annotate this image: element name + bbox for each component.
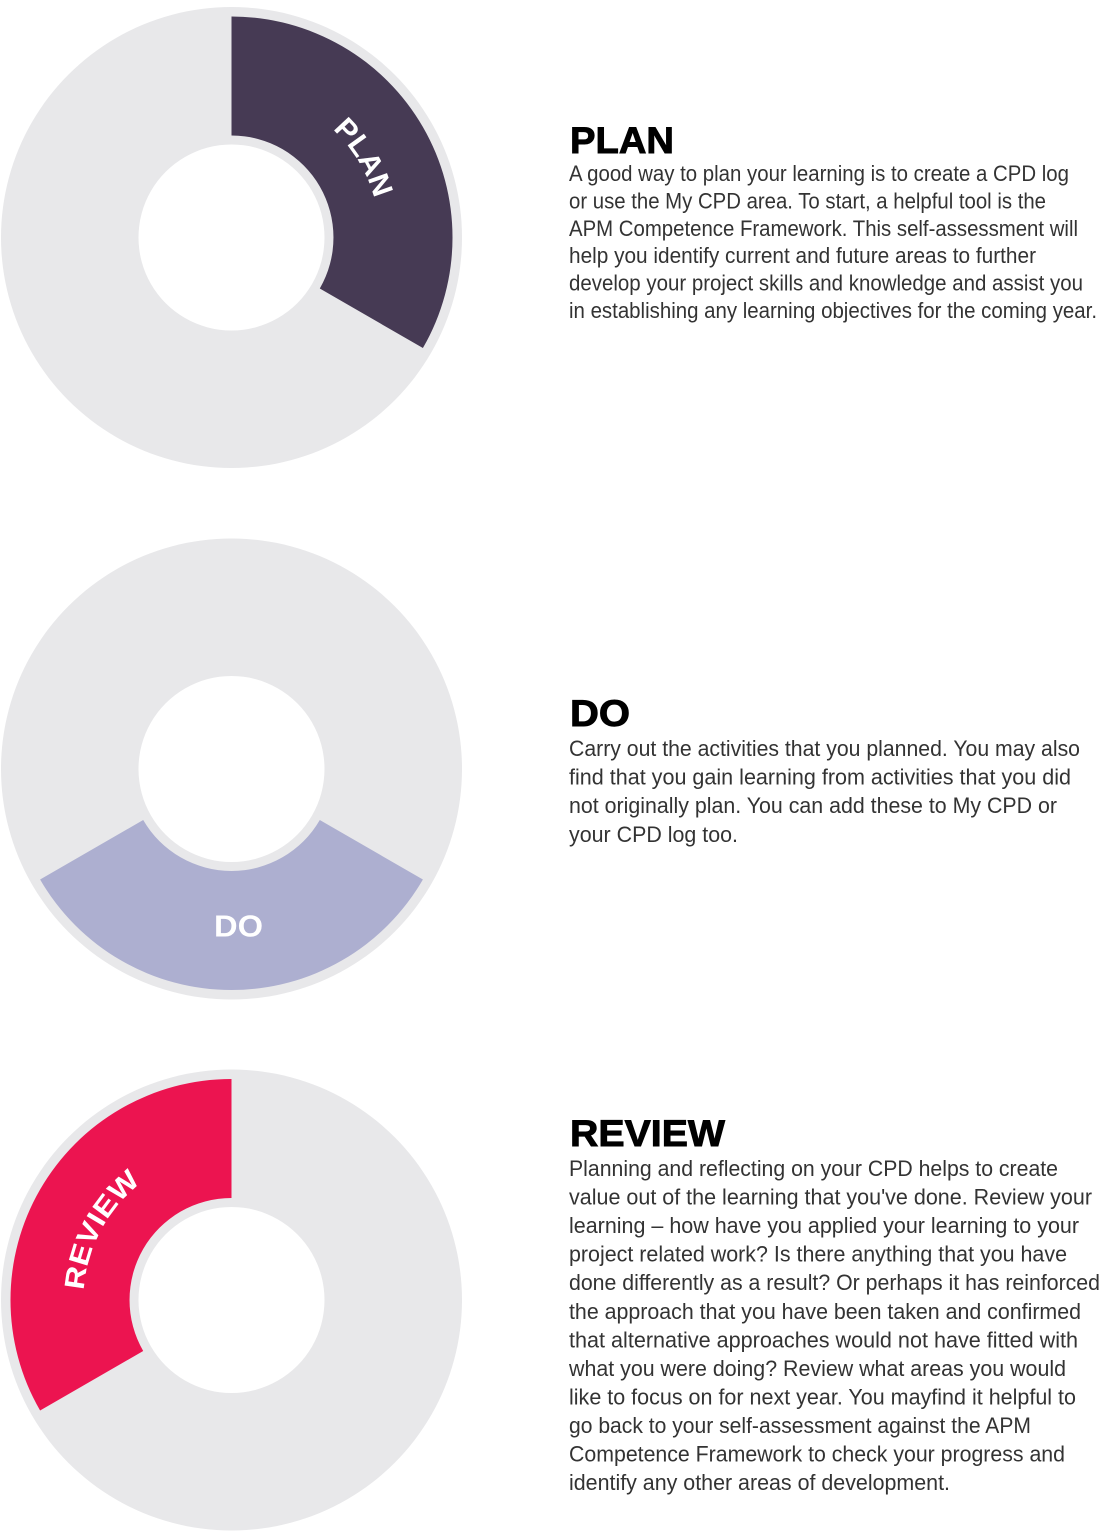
text block: do <box>569 736 1080 847</box>
donut ring: plan <box>1 7 462 468</box>
donut ring: do <box>1 538 462 1000</box>
panel: do donut chart <box>1 538 462 1000</box>
text block: do: your CPD log too. <box>569 822 738 847</box>
text block: review: like to focus on for next year. You mayfind it helpful to <box>569 1384 1076 1409</box>
text block: do: not originally plan. You can add these to My CPD or <box>569 793 1057 818</box>
text block: review: go back to your self-assessment against the APM <box>569 1413 1031 1438</box>
text block: review: value out of the learning that you've done. Review your <box>569 1185 1092 1210</box>
text block: plan: A good way to plan your learning is to create a CPD log <box>569 161 1069 186</box>
segment label: review: REVIEW <box>64 1168 137 1288</box>
heading: plan: PLAN <box>570 120 674 161</box>
heading: do: DO <box>570 693 630 734</box>
text block: do: find that you gain learning from activities that you did <box>569 765 1071 790</box>
segment label: do: DO <box>214 908 263 944</box>
text block: review: identify any other areas of development. <box>569 1470 950 1495</box>
text block: plan <box>569 161 1097 323</box>
text block: review: that alternative approaches would not have fitted with <box>569 1327 1078 1352</box>
heading: review: REVIEW <box>570 1113 725 1154</box>
text block: review: learning – how have you applied your learning to your <box>569 1213 1079 1238</box>
text block: review: Planning and reflecting on your CPD helps to create <box>569 1156 1058 1181</box>
segment label: plan: PLAN <box>334 116 393 196</box>
panel: review donut chart <box>1 1070 462 1530</box>
segment: plan <box>232 16 453 348</box>
text block: plan: help you identify current and future areas to further <box>569 243 1036 268</box>
donut ring: review <box>1 1070 462 1530</box>
text block: review: the approach that you have been taken and confirmed <box>569 1299 1081 1324</box>
text block: plan: or use the My CPD area. To start, a helpful tool is the <box>569 188 1046 213</box>
segment: do <box>40 820 423 990</box>
text block: review: project related work? Is there anything that you have <box>569 1242 1067 1267</box>
text block: review: what you were doing? Review what areas you would <box>568 1356 1066 1381</box>
text block: review <box>568 1156 1100 1495</box>
text block: review: Competence Framework to check your progress and <box>569 1442 1065 1466</box>
panel: plan donut chart <box>1 7 462 468</box>
text block: do: Carry out the activities that you planned. You may also <box>569 736 1080 761</box>
segment: review <box>10 1079 232 1410</box>
